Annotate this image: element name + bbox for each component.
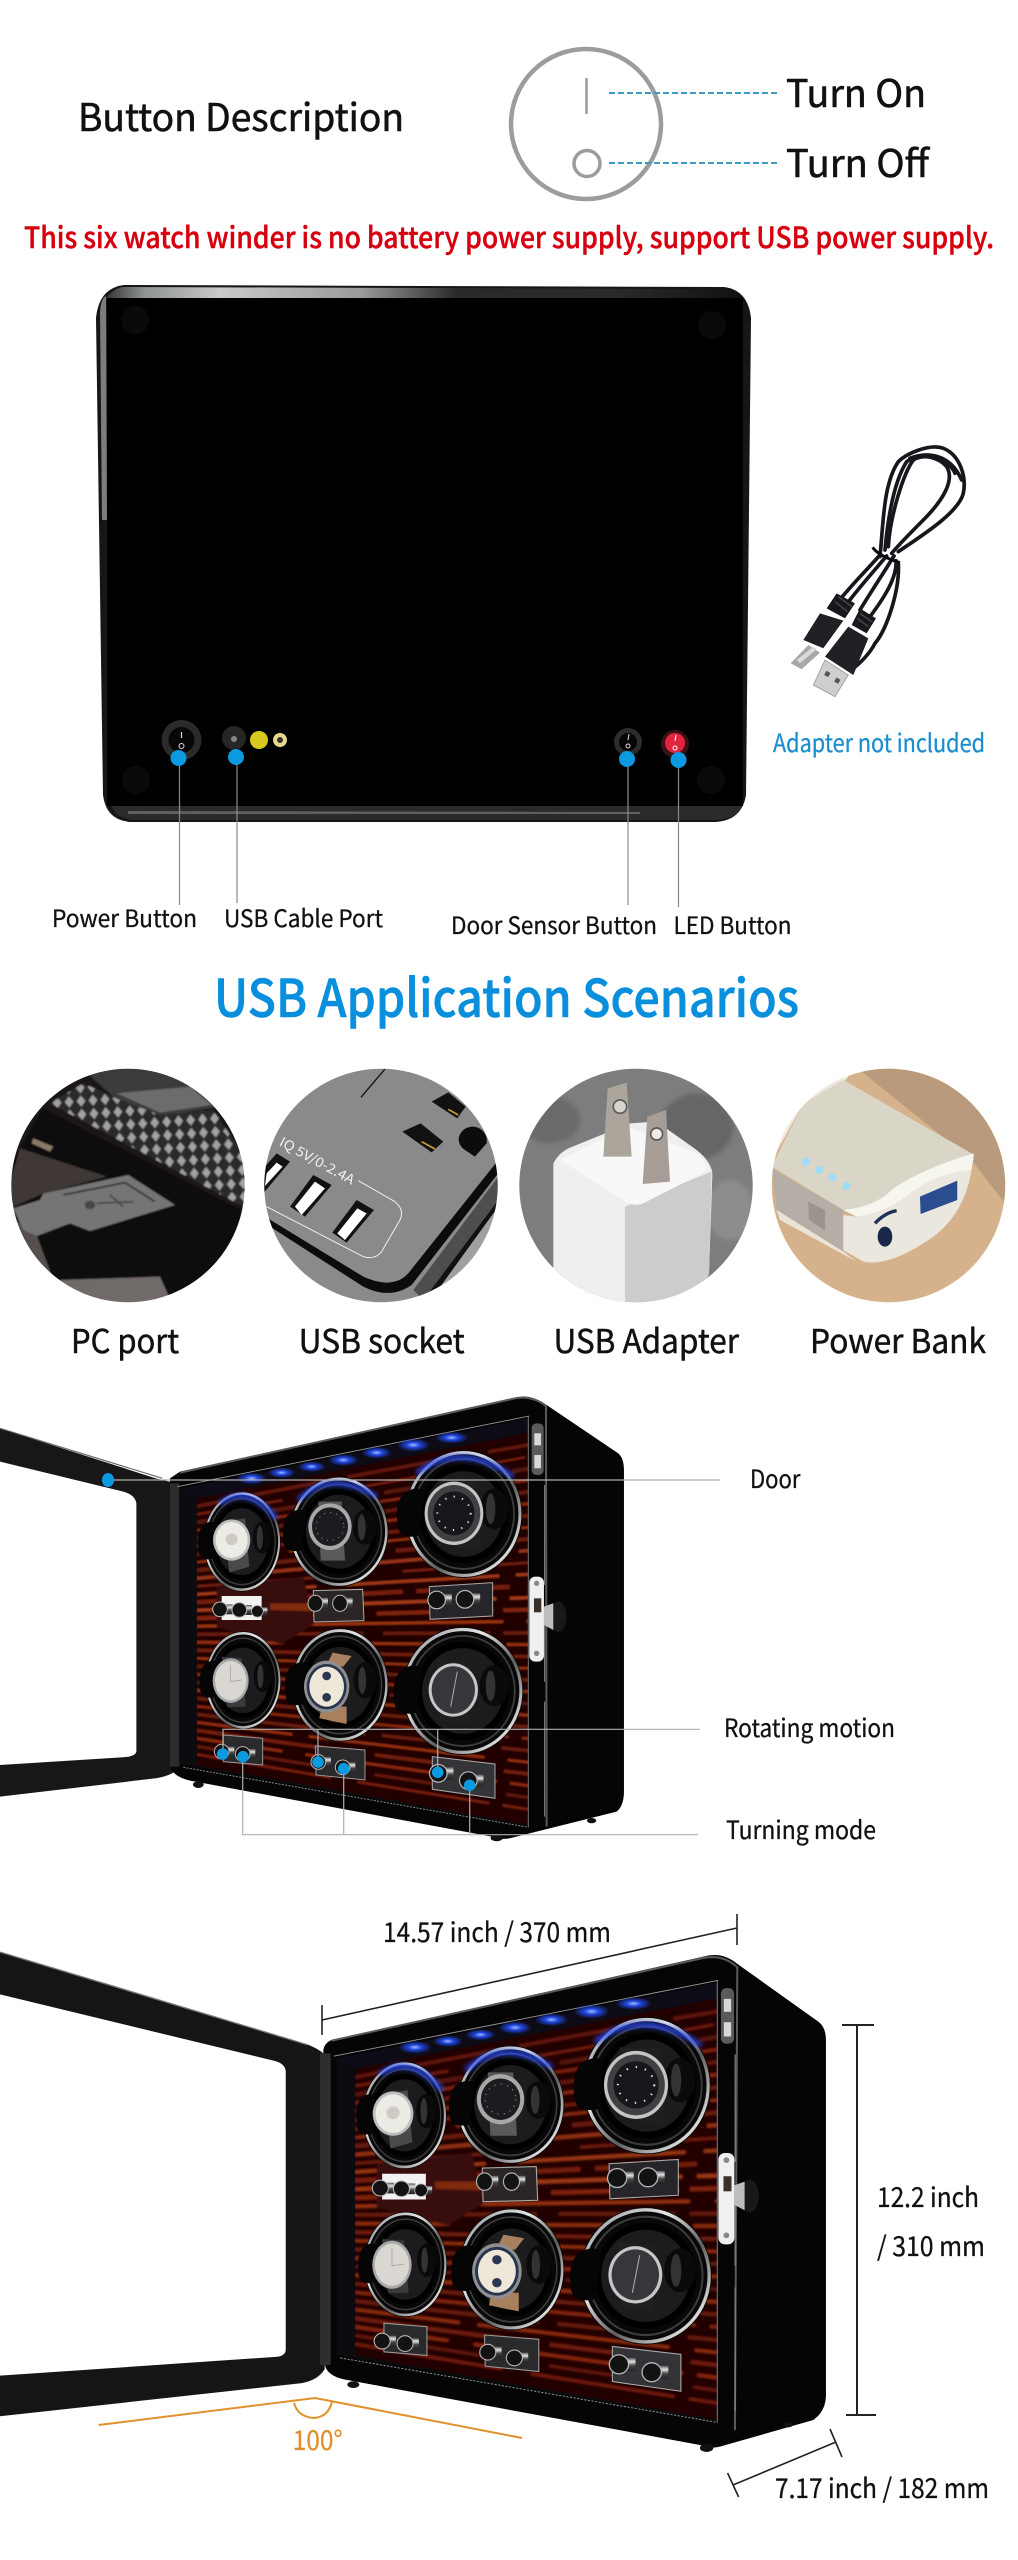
lower winder interior: wood panel, watches, controls, LEDs, lock <box>334 1980 759 2425</box>
dimension: width: 14.57 inch / 370 mm <box>383 1911 611 1950</box>
power button <box>162 720 202 760</box>
scenario: PC port <box>7 1065 250 1363</box>
panel feet <box>121 306 726 794</box>
dimension: depth: 7.17 inch / 182 mm <box>775 2467 989 2506</box>
label: PC port <box>71 1315 179 1363</box>
callout: USB cable port: USB Cable Port <box>224 899 383 934</box>
photo: laptop USB port <box>7 1065 250 1308</box>
label: USB socket <box>299 1315 465 1363</box>
callout: turning mode <box>237 1751 876 1847</box>
lower winder case <box>320 1955 826 2452</box>
upper winder case <box>170 1397 624 1841</box>
LED button <box>661 730 689 758</box>
icon: rocker switch diagram <box>511 49 661 199</box>
dimension: height: / 310 mm <box>877 2225 985 2264</box>
callout: door <box>102 1460 801 1496</box>
door of lower winder <box>0 1952 325 2416</box>
door opening angle: 100° <box>293 2419 343 2458</box>
panel: winder back view <box>96 285 751 822</box>
label: USB Adapter <box>554 1315 739 1363</box>
callout: rotating motion: Rotating motion <box>724 1709 895 1745</box>
label: Power Bank <box>810 1315 986 1363</box>
photo: power strip <box>260 1065 503 1308</box>
dimension: height <box>842 2025 985 2415</box>
callout: power button <box>52 750 197 934</box>
scenario: USB adapter <box>517 1065 757 1363</box>
callout: door sensor button <box>451 751 657 941</box>
callout: door: Door <box>750 1460 801 1496</box>
dimension: width <box>322 1911 737 2035</box>
callout: rotating motion <box>217 1709 895 1778</box>
door sensor button <box>614 728 642 756</box>
photo: wall charger <box>517 1065 757 1308</box>
dimension: height: 12.2 inch <box>877 2176 979 2215</box>
heading: USB application scenarios: USB Application Scenarios <box>214 957 799 1032</box>
photo: power bank <box>767 1065 1010 1308</box>
door of upper winder <box>0 1428 179 1797</box>
turn on callout: Turn On <box>786 63 926 118</box>
scenario: power bank <box>767 1065 1010 1363</box>
callout: turning mode: Turning mode <box>726 1811 876 1847</box>
note: adapter not included: Adapter not included <box>773 724 985 760</box>
socket rating text: IQ 5V/0-2.4A <box>276 1132 360 1189</box>
callout: USB cable port <box>224 749 383 934</box>
upper winder interior: wood panel, watches, controls, LEDs, lock <box>177 1416 566 1830</box>
door opening angle <box>99 2398 522 2458</box>
heading: button description: Button Description <box>78 87 404 142</box>
scenario: USB socket <box>260 1065 503 1363</box>
callout: LED button: LED Button <box>674 906 792 941</box>
callout: LED button <box>670 752 792 941</box>
turn off callout: Turn Off <box>786 133 931 188</box>
callout: door sensor button: Door Sensor Button <box>451 906 657 941</box>
USB port and certification marks <box>222 726 287 750</box>
dimension: depth <box>728 2429 989 2506</box>
icon: USB cable <box>791 447 964 697</box>
callout: power button: Power Button <box>52 899 197 934</box>
